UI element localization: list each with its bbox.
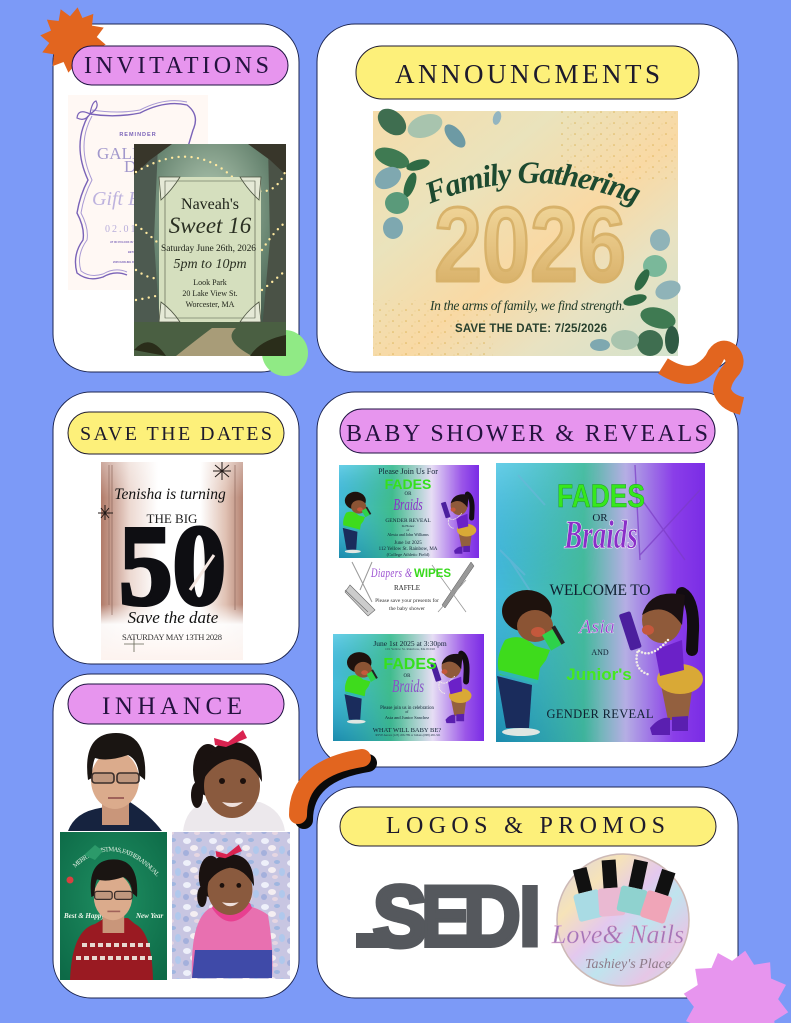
panel: logos and promos — [317, 787, 791, 1023]
save the date: big 50 card: Tenisha is turning — [114, 486, 226, 503]
logo: love and nails: Love& Nails — [551, 920, 684, 949]
photo: boy holiday portrait: MERRY CHRISTMAS, FATHER ANNUAL — [72, 846, 159, 876]
logo: sedi: D — [463, 869, 521, 965]
heading: inhance — [68, 684, 284, 724]
gold balloon number 2026: 2026 — [434, 186, 626, 304]
heading: baby shower and reveals: BABY SHOWER & REVEALS — [346, 421, 708, 447]
invitation: sweet 16 forest card: Look Park — [193, 278, 227, 287]
baby card: please join us: Please Join Us For — [378, 467, 438, 476]
save the date: big 50 card — [98, 462, 243, 660]
save the date: big 50 card: THE BIG — [147, 511, 197, 526]
baby card: june 1st invitation — [333, 634, 484, 741]
baby card: june 1st invitation: June 1st 2025 at 3:30pm — [373, 639, 447, 648]
baby card: diapers and wipes raffle: Diapers & — [370, 567, 412, 580]
baby card: please join us: Alexia and John Williams — [387, 532, 429, 537]
baby card: welcome poster: FADES — [557, 478, 645, 514]
announcement: family gathering card — [373, 108, 680, 356]
baby card: welcome poster: Junior's — [566, 665, 632, 684]
save the date: big 50 card: 50 — [119, 502, 226, 629]
logo: love and nails — [551, 854, 689, 986]
baby card: diapers and wipes raffle: WIPES — [414, 568, 451, 580]
invitation: sweet 16 forest card: 5pm to 10pm — [173, 257, 247, 272]
baby card: please join us: June 1st 2025 — [394, 541, 422, 546]
heading: logos and promos: LOGOS & PROMOS — [386, 813, 665, 839]
invitation: sweet 16 forest card: Worcester, MA — [186, 300, 235, 309]
invitation: reminder card: BETWEEN — [128, 250, 141, 254]
panel: announcements — [316, 24, 738, 372]
invitation: reminder card: 2005 DARLING ROAD — [113, 260, 140, 264]
baby card: please join us: OR — [405, 492, 412, 497]
baby card: diapers and wipes raffle — [345, 562, 474, 616]
save the date: big 50 card: Save the date — [128, 608, 219, 627]
baby card: june 1st invitation: of — [405, 710, 409, 714]
invitation: reminder card — [68, 95, 208, 290]
logo: love and nails: Tashiey's Place — [585, 957, 671, 972]
baby card: please join us: 112 Yellow St. Rainbow, MA — [379, 547, 438, 552]
baby card: june 1st invitation: RSVP Aurora (123) 456-789 or Juliana (098) 465-321 — [376, 733, 441, 737]
baby card: please join us: (College Athletic Field) — [387, 552, 430, 557]
photo: boy holiday portrait: Best & Happy — [63, 912, 105, 920]
decoration: orange squiggle — [663, 350, 742, 406]
baby card: please join us: Braids — [393, 497, 423, 515]
baby card: diapers and wipes raffle: the baby shower — [389, 606, 425, 612]
heading: announcements — [356, 46, 699, 99]
baby card: welcome poster: OR — [592, 512, 608, 524]
baby card: please join us: of — [407, 528, 410, 532]
baby card: welcome poster: WELCOME TO — [550, 582, 650, 599]
invitation: reminder card: DAY — [124, 157, 159, 176]
logo: sedi: I — [518, 869, 542, 965]
icon: pink starburst — [675, 942, 791, 1023]
invitation: sweet 16 forest card: Sweet 16 — [169, 213, 252, 238]
photo: boy holiday portrait: New Year — [135, 912, 164, 920]
invitation: reminder card: GALENTINE'S — [97, 144, 206, 163]
logo: sedi: E — [421, 869, 471, 965]
decoration: orange arc with black shadow — [298, 758, 368, 820]
leaves: top left — [371, 103, 503, 239]
baby card: welcome poster: AND — [591, 648, 609, 657]
baby card: june 1st invitation: Asia and Junior Sanchez — [385, 715, 429, 720]
heading: announcements: ANNOUNCMENTS — [395, 59, 660, 89]
photo: girl glitter portrait — [172, 832, 290, 979]
invitation: reminder card: 02.01.26 — [105, 224, 156, 235]
baby card: diapers and wipes raffle: RAFFLE — [394, 584, 420, 592]
photo: girl portrait — [183, 730, 285, 831]
baby card: welcome poster: Braids — [563, 513, 638, 557]
invitation: sweet 16 forest card: Naveah's — [181, 196, 239, 213]
baby card: please join us — [339, 465, 479, 558]
heading: inhance: INHANCE — [102, 693, 242, 720]
panel: inhance — [52, 674, 300, 998]
heading: save the dates: SAVE THE DATES — [80, 423, 272, 445]
tagline: In the arms of family, we find strength. — [429, 298, 625, 313]
baby card: please join us: FADES — [385, 476, 431, 492]
panel: baby shower and reveals — [317, 392, 738, 767]
baby card: please join us: GENDER REVEAL — [385, 518, 431, 524]
heading: logos and promos — [340, 807, 716, 846]
heading: baby shower and reveals — [340, 409, 715, 453]
heading: invitations — [72, 46, 288, 85]
save the date line: SAVE THE DATE: 7/25/2026 — [455, 323, 607, 335]
invitation: sweet 16 forest card: 20 Lake View St. — [182, 289, 238, 298]
icon: orange starburst — [36, 3, 110, 77]
baby card: please join us: In Honor — [402, 524, 415, 528]
heading: save the dates — [68, 412, 284, 454]
baby card: june 1st invitation: FADES — [383, 656, 437, 673]
baby card: welcome poster — [496, 463, 705, 742]
baby card: june 1st invitation: WHAT WILL BABY BE? — [373, 727, 441, 734]
save the date: big 50 card: SATURDAY MAY 13TH 2028 — [122, 632, 222, 642]
invitation: reminder card: AT 06 O'CLOCK IN THE — [110, 240, 139, 244]
baby card: welcome poster: GENDER REVEAL — [546, 707, 654, 721]
baby card: june 1st invitation: OR — [404, 674, 411, 679]
invitation: sweet 16 forest card: Saturday June 26th, 2026 — [161, 244, 256, 254]
leaves: bottom right — [590, 229, 683, 356]
invitation: reminder card: Gift Exchange — [92, 188, 207, 210]
baby card: june 1st invitation: Braids — [392, 677, 424, 697]
baby card: june 1st invitation: Please join us in celebration — [380, 706, 435, 711]
baby card: welcome poster: Asia — [577, 616, 615, 638]
heading: invitations: INVITATIONS — [84, 53, 269, 79]
logo: sedi: S — [373, 869, 427, 965]
logo: sedi — [356, 869, 542, 965]
invitation: reminder card: REMINDER — [119, 132, 157, 138]
icon: green circle — [262, 330, 308, 376]
panel: save the dates — [53, 392, 299, 664]
invitation: sweet 16 forest card — [134, 144, 286, 356]
panel: invitations — [36, 3, 308, 376]
script title: family gathering: Family Gathering — [426, 162, 640, 208]
baby card: diapers and wipes raffle: Please save your presents for — [375, 597, 439, 604]
photo: boy portrait — [68, 733, 162, 831]
baby card: june 1st invitation: 101 Yellow St. Rainbow, Ma 01010 — [385, 647, 435, 652]
photo: boy holiday portrait — [60, 832, 167, 980]
